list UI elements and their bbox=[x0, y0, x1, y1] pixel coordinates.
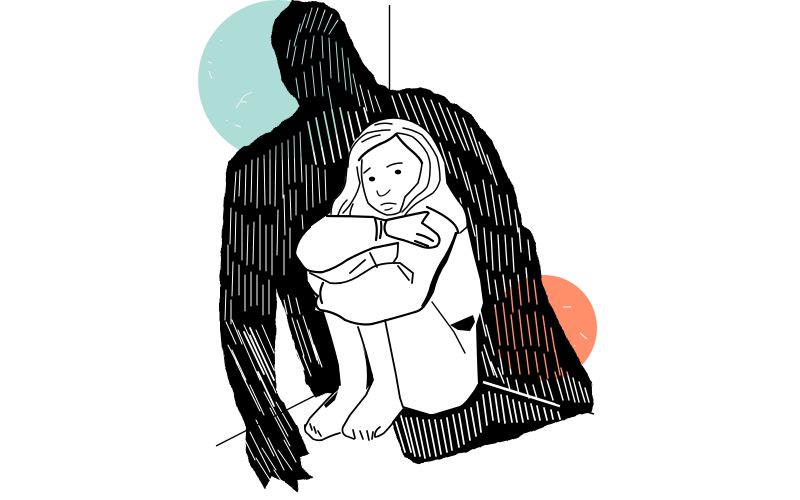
eyebrows and eyes bbox=[364, 163, 402, 173]
knees and thighs bbox=[308, 283, 426, 324]
body shading line bbox=[421, 232, 458, 308]
body silhouette bbox=[295, 118, 483, 440]
fringe bbox=[359, 134, 422, 163]
feet and toes bbox=[305, 413, 400, 440]
hair outline and strands bbox=[331, 118, 467, 233]
wall corner line bbox=[388, 5, 390, 96]
illustration: child with looming shadow bbox=[198, 0, 597, 492]
shin hatching bbox=[324, 345, 373, 408]
arms and hand bbox=[295, 207, 458, 272]
face outline bbox=[362, 160, 422, 215]
floor line right bbox=[483, 382, 594, 414]
belt flag bbox=[450, 315, 475, 331]
looming shadow figure bbox=[220, 1, 593, 493]
child figure bbox=[295, 118, 483, 440]
legs bbox=[305, 312, 478, 427]
floor line left bbox=[216, 395, 316, 446]
sleeve folds bbox=[310, 243, 413, 283]
nose and mouth bbox=[377, 190, 396, 210]
thigh line bbox=[432, 302, 465, 353]
orange circle bbox=[491, 275, 597, 381]
teal circle bbox=[198, 0, 358, 160]
